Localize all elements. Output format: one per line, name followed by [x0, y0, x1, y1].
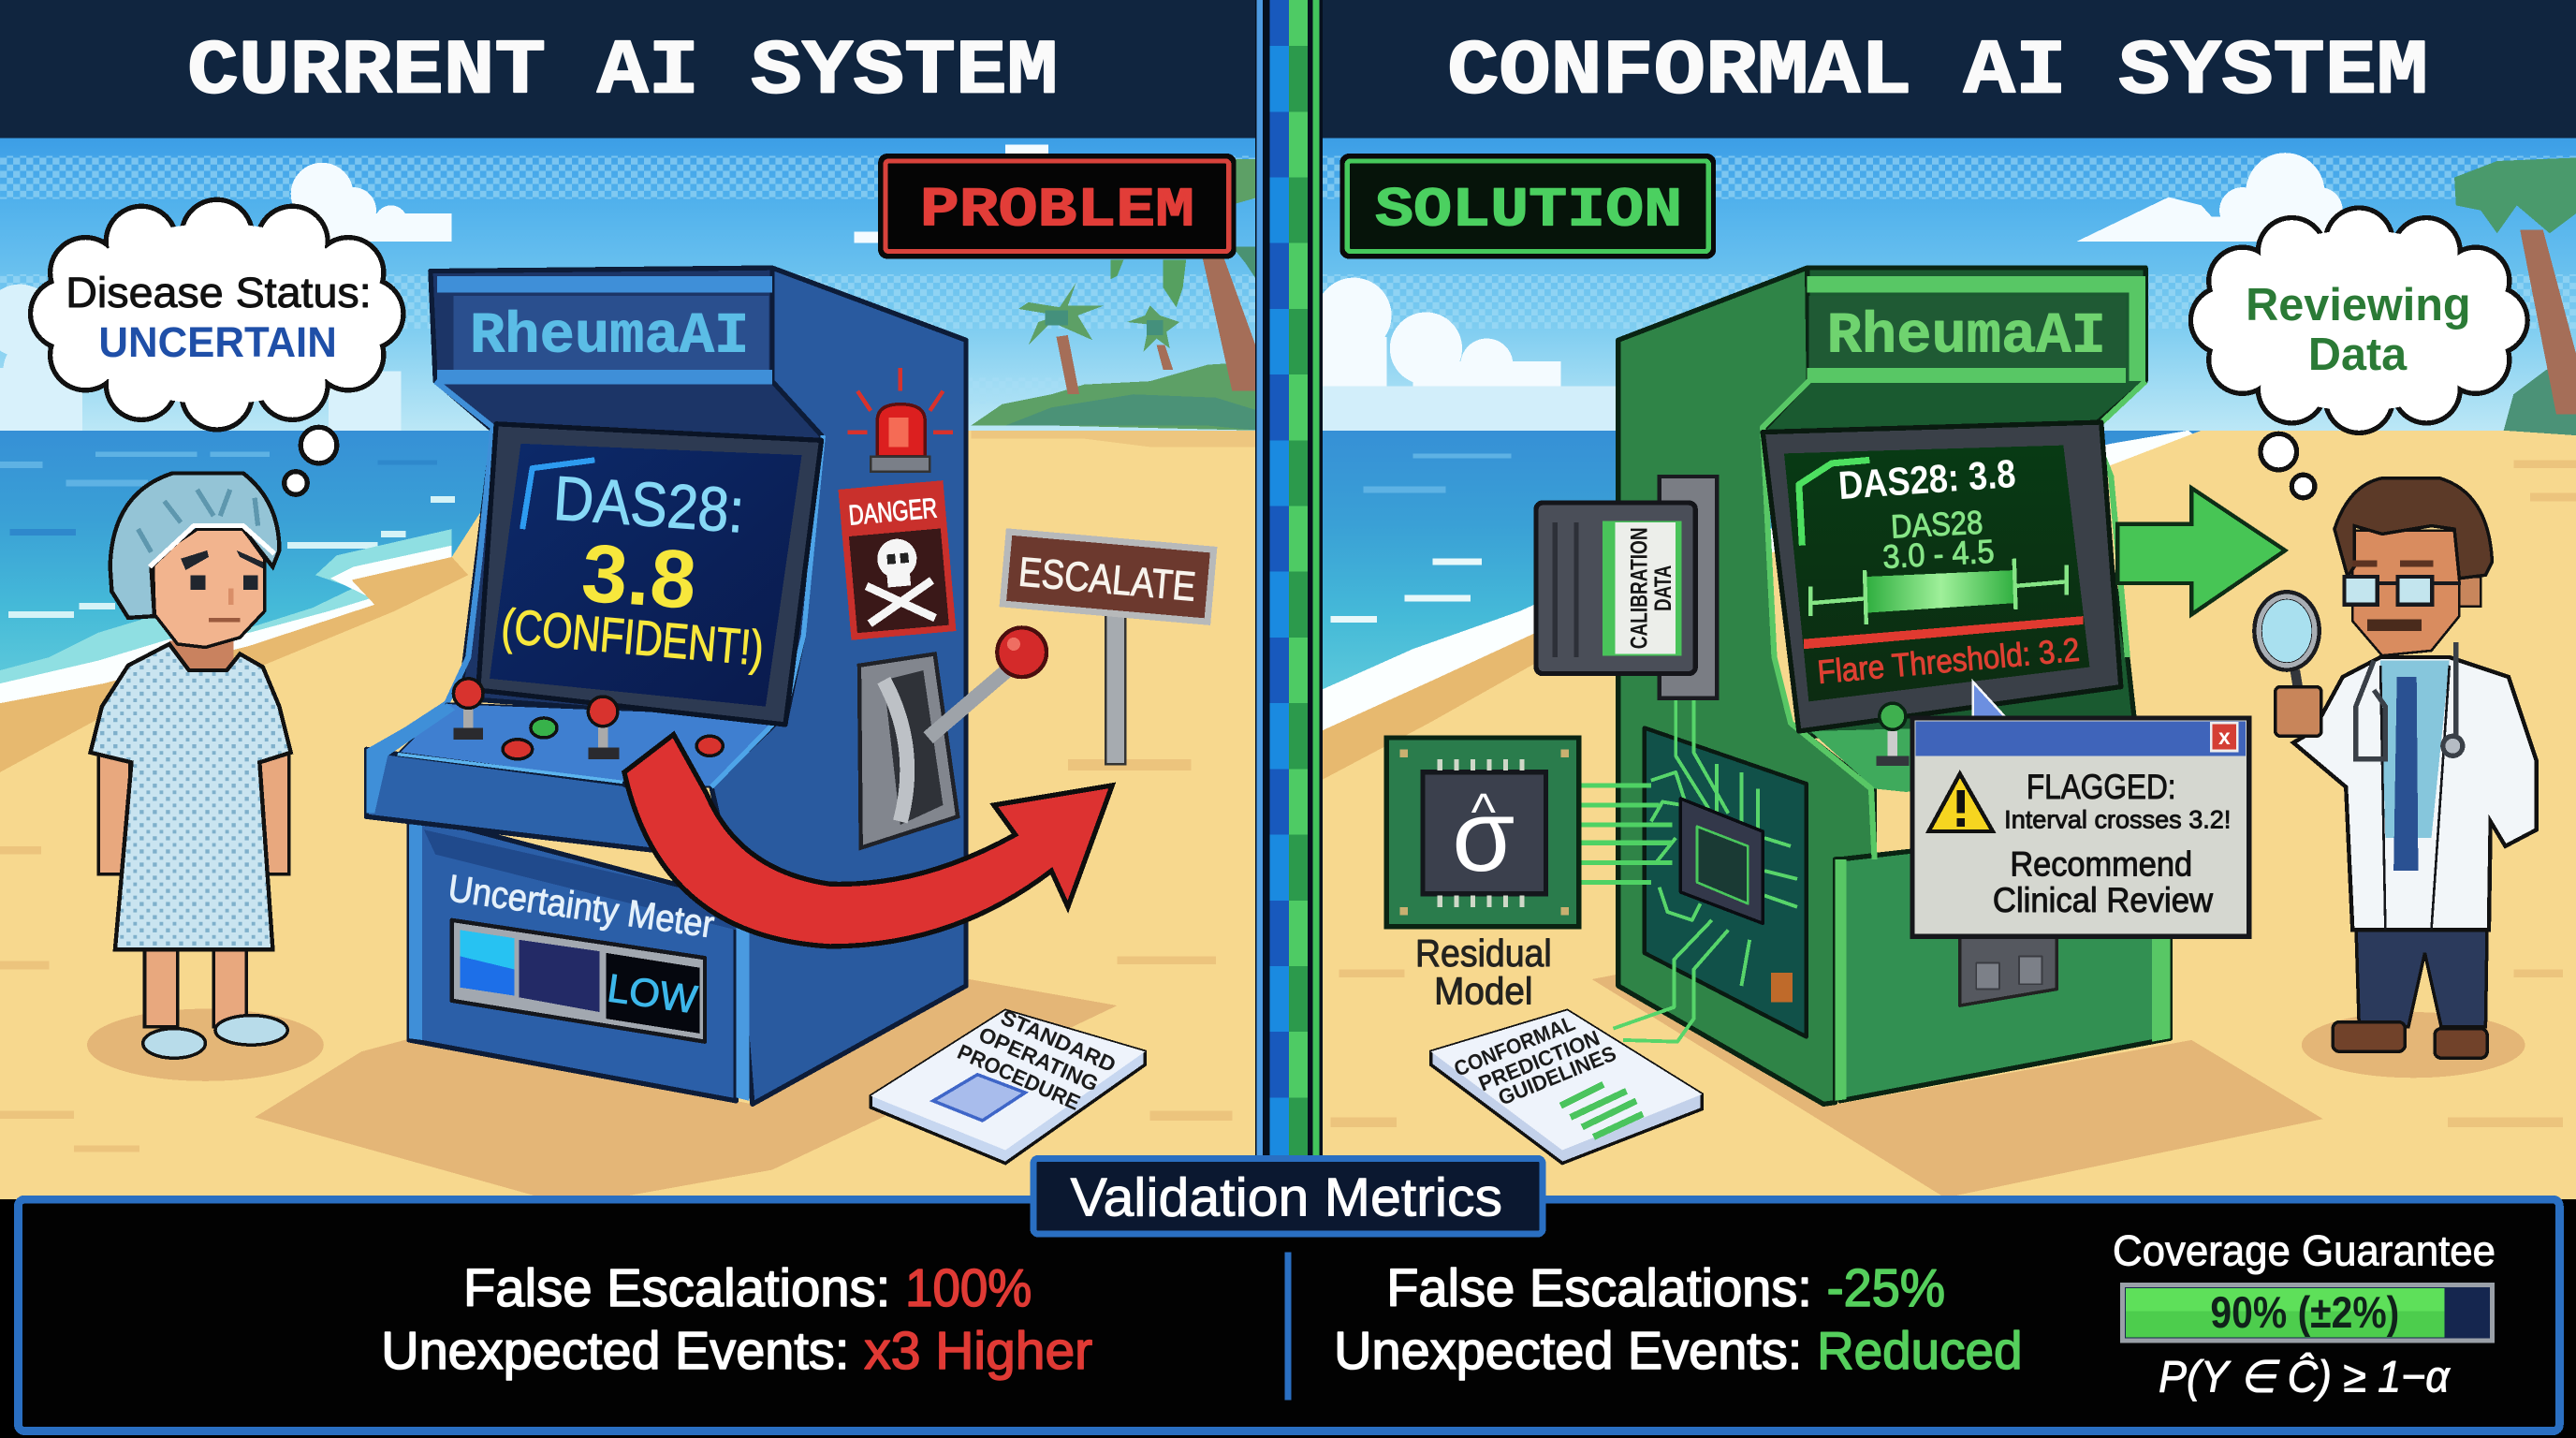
popup: flagged alert: Recommend [2010, 844, 2192, 883]
conformal system metrics [1334, 1258, 2022, 1380]
screen [1784, 446, 2089, 701]
marquee [1808, 276, 2145, 383]
component [1771, 973, 1793, 1003]
wet sand band [1321, 633, 1560, 781]
coverage formula: P(Y ∈ Ĉ) ≥ 1−α [2159, 1352, 2452, 1402]
sigma hat symbol: σ [1452, 779, 1515, 893]
metrics title tab [1033, 1158, 1543, 1234]
popup: flagged alert: Interval crosses 3.2! [2004, 805, 2231, 834]
sea [0, 431, 1258, 726]
screen: 3.0 - 4.5 [1881, 534, 1996, 576]
residual model label [1415, 932, 1552, 1012]
coverage guarantee: Coverage Guarantee [2113, 1226, 2496, 1274]
arcade machine: RheumaAI conformal [1613, 268, 2170, 1104]
trim right [2093, 381, 2145, 657]
console [1810, 723, 2136, 792]
document: standard operating procedure [871, 1005, 1145, 1164]
mustache [2367, 620, 2422, 631]
conformal system metrics: Unexpected Events: [1334, 1321, 1802, 1380]
hair net [110, 473, 279, 618]
conformal system metrics: False Escalations: [1386, 1258, 1812, 1317]
arrow: green to clinician [2117, 488, 2285, 614]
trousers [2356, 920, 2487, 1027]
popup: flagged alert: FLAGGED: [2027, 768, 2176, 806]
upper front [1763, 268, 2145, 736]
console buttons [453, 679, 723, 759]
interval bar [1810, 559, 2067, 624]
sand [1321, 431, 2576, 1199]
popup: flagged alert [1912, 682, 2249, 936]
conformal system metrics: Reduced [1817, 1321, 2022, 1380]
machine shadow [255, 979, 1117, 1197]
background clouds [1316, 153, 2349, 431]
head [2352, 531, 2459, 655]
foam [0, 529, 452, 707]
header: conformal AI system [1321, 0, 2576, 138]
coverage bar [2123, 1284, 2492, 1341]
popup: flagged alert: x [2218, 725, 2231, 749]
icon: skull and crossbones [863, 536, 935, 624]
lower front cabinet [409, 814, 736, 1101]
panel: current AI system scene [0, 138, 1258, 1199]
console joystick [1876, 703, 1909, 766]
uncertainty meter label: Uncertainty Meter [446, 866, 717, 946]
center divider [1284, 1252, 1292, 1400]
surf crests [1331, 559, 1482, 623]
header: current AI system [0, 0, 1258, 138]
DAS28 reading: DAS28: 3.8 [1837, 451, 2017, 507]
escalate sign [1003, 532, 1214, 764]
screen bezel [1763, 422, 2121, 731]
hair net folds [138, 490, 258, 552]
circuit board [1613, 695, 1807, 1042]
patient [91, 473, 291, 1058]
foam [1321, 431, 2202, 742]
legs [145, 945, 178, 1027]
confident label: (CONFIDENT!) [499, 598, 766, 677]
hair net band [150, 526, 274, 566]
current system metrics: x3 Higher [864, 1321, 1092, 1380]
upper front [431, 268, 822, 723]
metrics title tab: Validation Metrics [1070, 1168, 1502, 1228]
sky [0, 138, 1258, 433]
document: standard operating procedure: OPERATING [975, 1021, 1102, 1096]
escalate sign: ESCALATE [1017, 549, 1197, 610]
sky dither bands [1321, 156, 2576, 329]
wave highlights [1364, 453, 1512, 493]
expression [181, 550, 263, 622]
residual model chip: ^ [1471, 782, 1497, 841]
checklist [1560, 1084, 1643, 1137]
panel: validation metrics [18, 1158, 2559, 1431]
warning siren [848, 368, 953, 472]
badge: problem [883, 157, 1232, 255]
DAS28 label: DAS28: [551, 464, 746, 547]
gown [91, 644, 291, 949]
value 3.8: 3.8 [578, 527, 699, 626]
badge: solution: SOLUTION [1375, 178, 1682, 242]
panel: conformal AI system scene [1316, 138, 2576, 1199]
coverage bar: 90% (±2%) [2210, 1288, 2399, 1338]
danger sign [842, 484, 953, 637]
wet sand band [0, 557, 468, 772]
badge: problem: PROBLEM [920, 178, 1194, 242]
island [971, 361, 1258, 431]
magnifying glass [2257, 594, 2321, 736]
lower front cabinet [1840, 822, 2170, 1101]
sky dither bands [0, 156, 1258, 404]
shirt and tie [2380, 661, 2450, 838]
background clouds [0, 144, 1048, 431]
wave highlights [0, 452, 270, 486]
sand marks [1331, 460, 2576, 1127]
marquee [437, 276, 772, 385]
lab coat [2293, 657, 2537, 930]
coverage guarantee [2113, 1226, 2496, 1402]
island [2504, 365, 2576, 435]
flare threshold line [1804, 616, 2083, 649]
side panel [711, 268, 966, 1104]
thought bubble: disease status: Disease Status: [66, 269, 372, 316]
doctor shadow [2302, 1012, 2525, 1078]
title: CURRENT AI SYSTEM [187, 27, 1058, 115]
document: conformal prediction guidelines [1431, 1010, 1702, 1164]
shoes [2333, 1022, 2405, 1051]
thought bubble: disease status: UNCERTAIN [98, 318, 337, 366]
center divider [1255, 0, 1323, 1208]
glasses [2344, 577, 2461, 605]
current system metrics [381, 1258, 1092, 1380]
neck [169, 640, 233, 674]
palm tree [2454, 157, 2576, 414]
current system metrics: 100% [905, 1258, 1032, 1317]
arrow: red escalation [624, 734, 1112, 946]
patient shadow [87, 1009, 324, 1081]
uncertainty meter: LOW [605, 965, 700, 1021]
coin slot [1960, 936, 2056, 1005]
machine shadow [1592, 969, 2323, 1197]
wave shadows [10, 460, 437, 536]
popup: flagged alert: Clinical Review [1993, 881, 2213, 919]
control console [366, 435, 823, 851]
residual model label: Model [1434, 969, 1532, 1012]
screen bezel [478, 424, 822, 725]
residual model chip [1386, 738, 1579, 927]
lab coat lapels [2380, 666, 2450, 930]
chip traces [1579, 785, 1673, 882]
face [153, 529, 265, 647]
flare threshold label: Flare Threshold: 3.2 [1816, 632, 2081, 691]
residual model label: Residual [1415, 932, 1552, 975]
title: CONFORMAL AI SYSTEM [1447, 27, 2428, 115]
slippers [143, 1029, 205, 1058]
circuit traces [1613, 695, 1797, 1042]
arms [98, 749, 130, 874]
lever [859, 627, 1046, 848]
palm trees [1018, 159, 1258, 394]
brows [2352, 560, 2433, 566]
ear [137, 572, 158, 616]
sand [0, 431, 1258, 1199]
sea [1321, 431, 2241, 742]
document: standard operating procedure: STANDARD [997, 1005, 1120, 1077]
marquee: RheumaAI [470, 305, 749, 370]
current system metrics: False Escalations: [463, 1258, 890, 1317]
icon: warning triangle [1928, 774, 1993, 831]
calibration data cartridge: DATA [1651, 565, 1676, 611]
conformal system metrics: -25% [1827, 1258, 1945, 1317]
DAS28 interval: DAS28 [1890, 505, 1983, 546]
document: conformal prediction guidelines: GUIDELINES [1495, 1041, 1619, 1110]
thought bubble: reviewing data: Reviewing [2246, 280, 2471, 330]
processor [1680, 799, 1763, 923]
calibration data cartridge [1536, 477, 1717, 698]
doctor [2257, 478, 2537, 1058]
marquee: RheumaAI [1827, 305, 2106, 370]
thought bubble: disease status [33, 202, 401, 494]
sand marks [0, 759, 1232, 1152]
sky [1321, 138, 2576, 433]
side panel [1618, 268, 1875, 1104]
stethoscope [2356, 642, 2463, 759]
danger sign: DANGER [847, 492, 939, 532]
surf crests [8, 496, 455, 618]
screen [490, 444, 802, 707]
right ear [2459, 577, 2481, 607]
trim [1763, 381, 1875, 859]
current system metrics: Unexpected Events: [381, 1321, 849, 1380]
hair [2334, 478, 2492, 579]
badge: solution [1344, 157, 1712, 255]
thought bubble: reviewing data [2193, 211, 2525, 498]
cartridge label: CALIBRATION [1627, 527, 1652, 649]
arcade machine: RheumaAI current [366, 268, 966, 1104]
uncertainty meter [452, 920, 705, 1042]
neck trim [372, 381, 493, 753]
document: standard operating procedure: PROCEDURE [954, 1039, 1084, 1115]
document: conformal prediction guidelines: CONFORMAL [1450, 1010, 1578, 1081]
document: conformal prediction guidelines: PREDICTION [1475, 1025, 1603, 1096]
thought bubble: reviewing data: Data [2308, 330, 2408, 380]
